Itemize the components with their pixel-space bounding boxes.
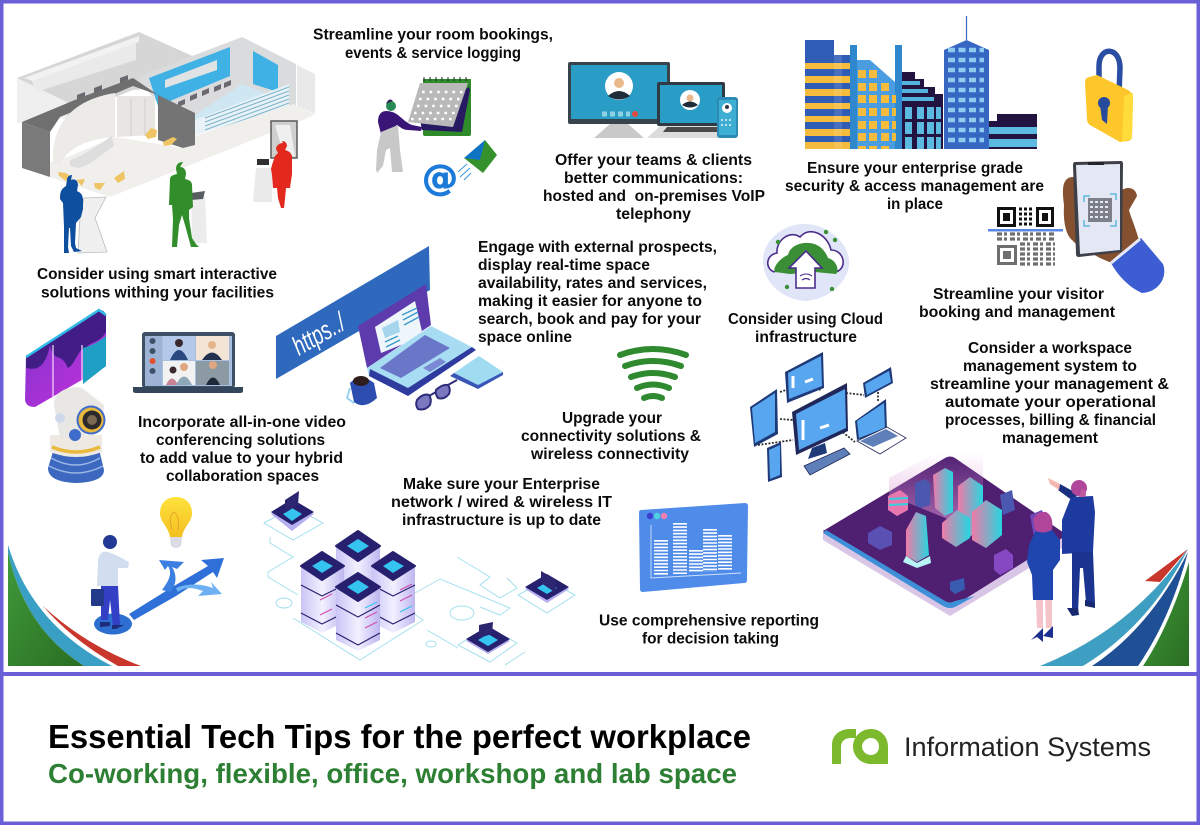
phone [717,97,738,138]
text: external prospects: availability, rates and services, [478,275,707,292]
keyboard [804,448,850,475]
text: smart interactive solutions: solutions withing your facilities [41,284,274,302]
illustration: city buildings [805,16,1037,149]
meeting chairs [77,75,231,107]
tablet top [785,352,824,403]
building: low dark block [989,114,1037,149]
text: communications: hosted and on-premises VoIP [543,188,765,205]
building: striped tower [805,40,850,149]
illustration: server racks network [264,491,575,665]
text: smart interactive solutions: Consider using smart interactive [37,266,277,283]
building: dark stepped tower [902,72,943,149]
bars [661,523,725,575]
network node: right [525,576,569,603]
text: video conferencing: conferencing solutions [156,432,325,449]
logo mark [832,729,856,764]
url text: https../ [287,306,352,361]
laptop base [367,326,472,396]
woman in suit [1027,530,1060,600]
back grey room [17,32,197,123]
block: small pink [888,490,908,516]
server rack: right [372,566,415,633]
curved white wall [53,93,115,165]
person [97,552,129,586]
tower: slim pink cyan [933,468,953,516]
block: right [972,500,1002,548]
icon: at sign and envelope: @ [422,158,458,199]
text: enterprise network: infrastructure is up to date [402,512,601,529]
platform [823,530,1067,616]
text: external prospects [478,239,717,346]
text: room bookings: Streamline your room bookings, [313,26,553,44]
text: security: security & access management are [785,178,1044,195]
text: room bookings: events & service logging [345,45,521,62]
laptop screen [358,284,431,368]
icon: idea person with lightbulb and arrows [91,497,224,634]
text: workspace management system: processes, billing & financial [945,412,1156,429]
illustration: smart city and two business people [823,453,1095,642]
laptop [657,82,725,126]
text: enterprise network: network / wired & wireless IT [391,494,612,511]
reception desk [70,136,114,168]
phone QR [1088,198,1112,222]
text: video conferencing: Incorporate all-in-one video [138,414,346,431]
icon: QR code [988,208,1063,264]
icon: at sign and envelope [422,140,497,199]
main monitor [792,383,848,455]
camera head [54,387,104,438]
kiosk: podium middle [191,196,207,243]
circuit lines [264,507,575,665]
person: green silhouette [169,162,199,247]
text: reporting: for decision taking [642,630,779,648]
text: external prospects: display real-time space [478,257,650,274]
sleeve [1111,238,1164,293]
network node: bottom [466,628,510,654]
text: workspace management system: management [1002,430,1099,447]
text: room bookings [313,26,553,62]
text: security: Ensure your enterprise grade [807,160,1023,177]
icon: cloud with upload arrow [763,224,849,301]
swoosh: bottom left corner [8,545,141,666]
text: visitor management: booking and management [919,304,1116,321]
phone [767,442,782,482]
text: visitor management: Streamline your visitor [933,286,1104,303]
network node: top left [271,501,314,531]
laptop [855,399,887,440]
text: video conferencing [138,414,346,485]
blue room [137,37,296,132]
illustration: connected devices [750,352,906,482]
building: light blue tower [850,45,902,149]
text: cloud infrastructure: infrastructure [755,329,857,346]
floor slab [22,104,315,197]
connector cables [758,378,878,445]
camera base [48,445,104,483]
illustration: video meeting laptop [133,332,243,393]
title: Essential Tech Tips for the perfect workplace [48,718,751,755]
glow [889,453,983,520]
text: workspace management system: management system to [963,358,1137,375]
text: workspace management system: automate your operational [945,394,1156,411]
notebook [454,356,503,385]
person: blue silhouette [60,175,83,253]
text: workspace management system [930,340,1169,447]
text: cloud infrastructure [728,311,883,346]
icon: person at wall calendar [376,77,471,173]
text: enterprise network: Make sure your Enterprise [403,476,600,493]
kiosk: podium right [253,168,272,202]
analytics panel [25,310,106,407]
text: external prospects: making it easier for anyone to [478,293,702,310]
server rack: back centre [336,546,380,622]
text: external prospects: search, book and pay for your [478,311,701,328]
icon: padlock [1085,51,1133,142]
tower: left hex [906,512,929,562]
server rack: front [336,587,380,651]
text: reporting [599,612,819,648]
text: security [785,160,1044,213]
phone body [1073,161,1123,257]
text: connectivity: connectivity solutions & [521,428,701,445]
illustration: camera and analytics panel [25,310,106,483]
path arrows [129,558,224,620]
yellow lounge chairs [58,128,177,190]
logo: ra Information Systems [832,729,1151,764]
text: video conferencing: to add value to your hybrid [140,450,343,467]
kiosk: touch table [78,197,107,253]
standing spot [94,614,132,634]
tablet left [750,389,778,447]
coffee mug [350,378,377,405]
illustration: VoIP video call devices [568,62,738,138]
desktop monitor [568,62,670,124]
text: external prospects: Engage with external prospects, [478,239,717,256]
lightbulb [160,497,192,537]
text: communications: telephony [616,206,691,223]
logo wordmark: Information Systems [904,732,1151,762]
wall screen [271,121,297,158]
text: visitor management [919,286,1116,321]
tower: tall centre [958,477,983,537]
text: connectivity [521,410,701,463]
text: smart interactive solutions [37,266,277,302]
dark partitions [22,78,158,132]
chart: reporting dashboard [639,503,748,592]
glasses [416,385,450,410]
subtitle: Co-working, flexible, office, workshop and lab space [48,758,737,789]
text: cloud infrastructure: Consider using Cloud [728,311,883,328]
text: external prospects: space online [478,329,572,346]
person: red silhouette [271,141,292,208]
small tablet [863,367,893,398]
text: workspace management system: streamline your management & [930,376,1169,393]
text: communications [543,152,765,223]
text: video conferencing: collaboration spaces [166,468,319,485]
text: connectivity: Upgrade your [562,410,662,427]
door [297,65,315,114]
man in suit [1058,484,1078,501]
building: glass skyscraper [944,40,989,149]
text: communications: better communications: [564,170,743,187]
text: reporting: Use comprehensive reporting [599,612,819,630]
icon: wifi signal [620,349,686,398]
text: connectivity: wireless connectivity [530,446,689,463]
server rack: left [301,566,344,633]
block: centre [942,510,970,547]
text: communications: Offer your teams & clients [555,152,752,169]
url banner [276,246,430,379]
swoosh: bottom right corner [1040,549,1189,666]
icon: hand holding phone [1063,161,1164,293]
low blocks [915,479,930,508]
hand [1063,177,1140,264]
text: security: in place [887,196,943,213]
illustration: https laptop [276,246,503,410]
text: enterprise network [391,476,612,529]
text: workspace management system: Consider a workspace [968,340,1132,357]
illustration: isometric smart office [17,32,315,253]
